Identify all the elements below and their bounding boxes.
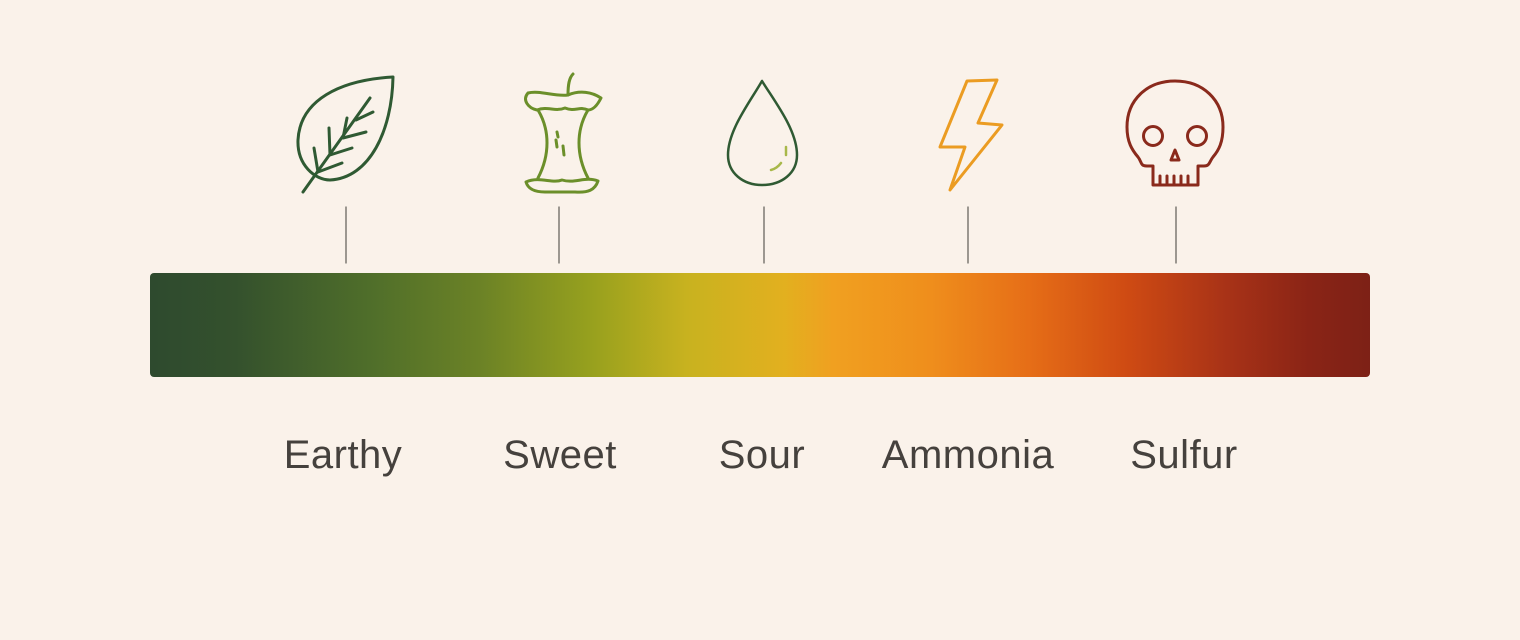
icon: leaf: [298, 77, 393, 192]
label: Sulfur: Sulfur: [1130, 433, 1238, 477]
label: Earthy: Earthy: [284, 433, 402, 477]
icon: lightning bolt: [940, 80, 1002, 190]
icon: skull: [1127, 81, 1223, 185]
label: Ammonia: Ammonia: [882, 433, 1054, 477]
gradient bar: [150, 273, 1370, 377]
tick marks: [346, 207, 1176, 263]
label: Sweet: Sweet: [503, 433, 617, 477]
icon: apple core: [526, 74, 601, 192]
icon: drop: [728, 81, 797, 185]
label: Sour: Sour: [719, 433, 805, 477]
